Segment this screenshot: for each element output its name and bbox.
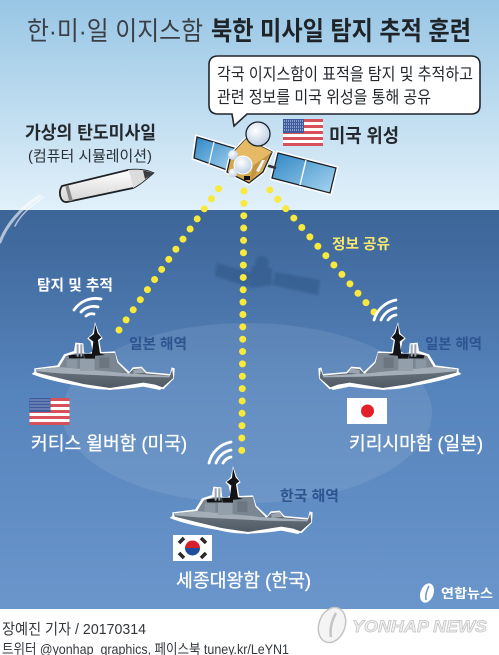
flag: South Korea (173, 535, 212, 561)
sky background (0, 0, 499, 211)
icon: US flag for satellite (283, 119, 323, 146)
speech bubble (209, 56, 480, 126)
title (27, 16, 471, 46)
shadow of satellite on sea (215, 256, 320, 295)
label: missile: 가상의 탄도미사일 (25, 123, 156, 143)
label: information sharing: 정보 공유 (332, 236, 390, 253)
label: missile (25, 123, 156, 165)
label: Sejong the Great: 세종대왕함 (한국) (176, 570, 311, 591)
logo: Yonhap News Korean: 연합뉴스 (441, 586, 493, 601)
logo: Yonhap News Korean (417, 581, 493, 605)
label: detect and track: 탐지 및 추적 (37, 277, 113, 294)
speech bubble: 관련 정보를 미국 위성을 통해 공유 (217, 88, 431, 107)
icon: signal waves left (74, 298, 101, 316)
white footer band (0, 609, 499, 655)
label: US satellite: 미국 위성 (329, 125, 399, 147)
satellite (194, 122, 336, 193)
watermark: Yonhap News (314, 604, 488, 646)
icon: signal waves right (374, 300, 396, 320)
flag: USA (30, 398, 70, 425)
credit: author and date: 장예진 기자 / 20170314 (2, 621, 146, 638)
yellow dotted signal lines (119, 188, 374, 453)
label: Kirishima: 키리시마함 (일본) (349, 433, 483, 454)
label: Japan waters right: 일본 해역 (425, 336, 482, 353)
label: missile: (컴퓨터 시뮬레이션) (28, 148, 152, 165)
flag: Japan (347, 398, 387, 424)
watermark: Yonhap News: YONHAP NEWS (352, 617, 488, 636)
light sea area (62, 323, 432, 503)
label: Japan waters left: 일본 해역 (129, 336, 187, 353)
sea background (0, 210, 499, 609)
missile (60, 170, 153, 202)
label: Curtis Wilbur: 커티스 윌버함 (미국) (31, 433, 187, 454)
icon: signal waves bottom (209, 442, 231, 463)
title: 한·미·일 이지스함 (27, 16, 203, 46)
title: 북한 미사일 탐지 추적 훈련 (211, 16, 471, 46)
label: Korea waters: 한국 해역 (280, 488, 339, 505)
missile trail (0, 196, 44, 242)
ship: Kirishima (318, 322, 461, 390)
ship: Sejong the Great (170, 466, 313, 534)
ship: Curtis Wilbur (32, 322, 175, 390)
speech bubble: 각국 이지스함이 표적을 탐지 및 추적하고 (217, 65, 473, 84)
